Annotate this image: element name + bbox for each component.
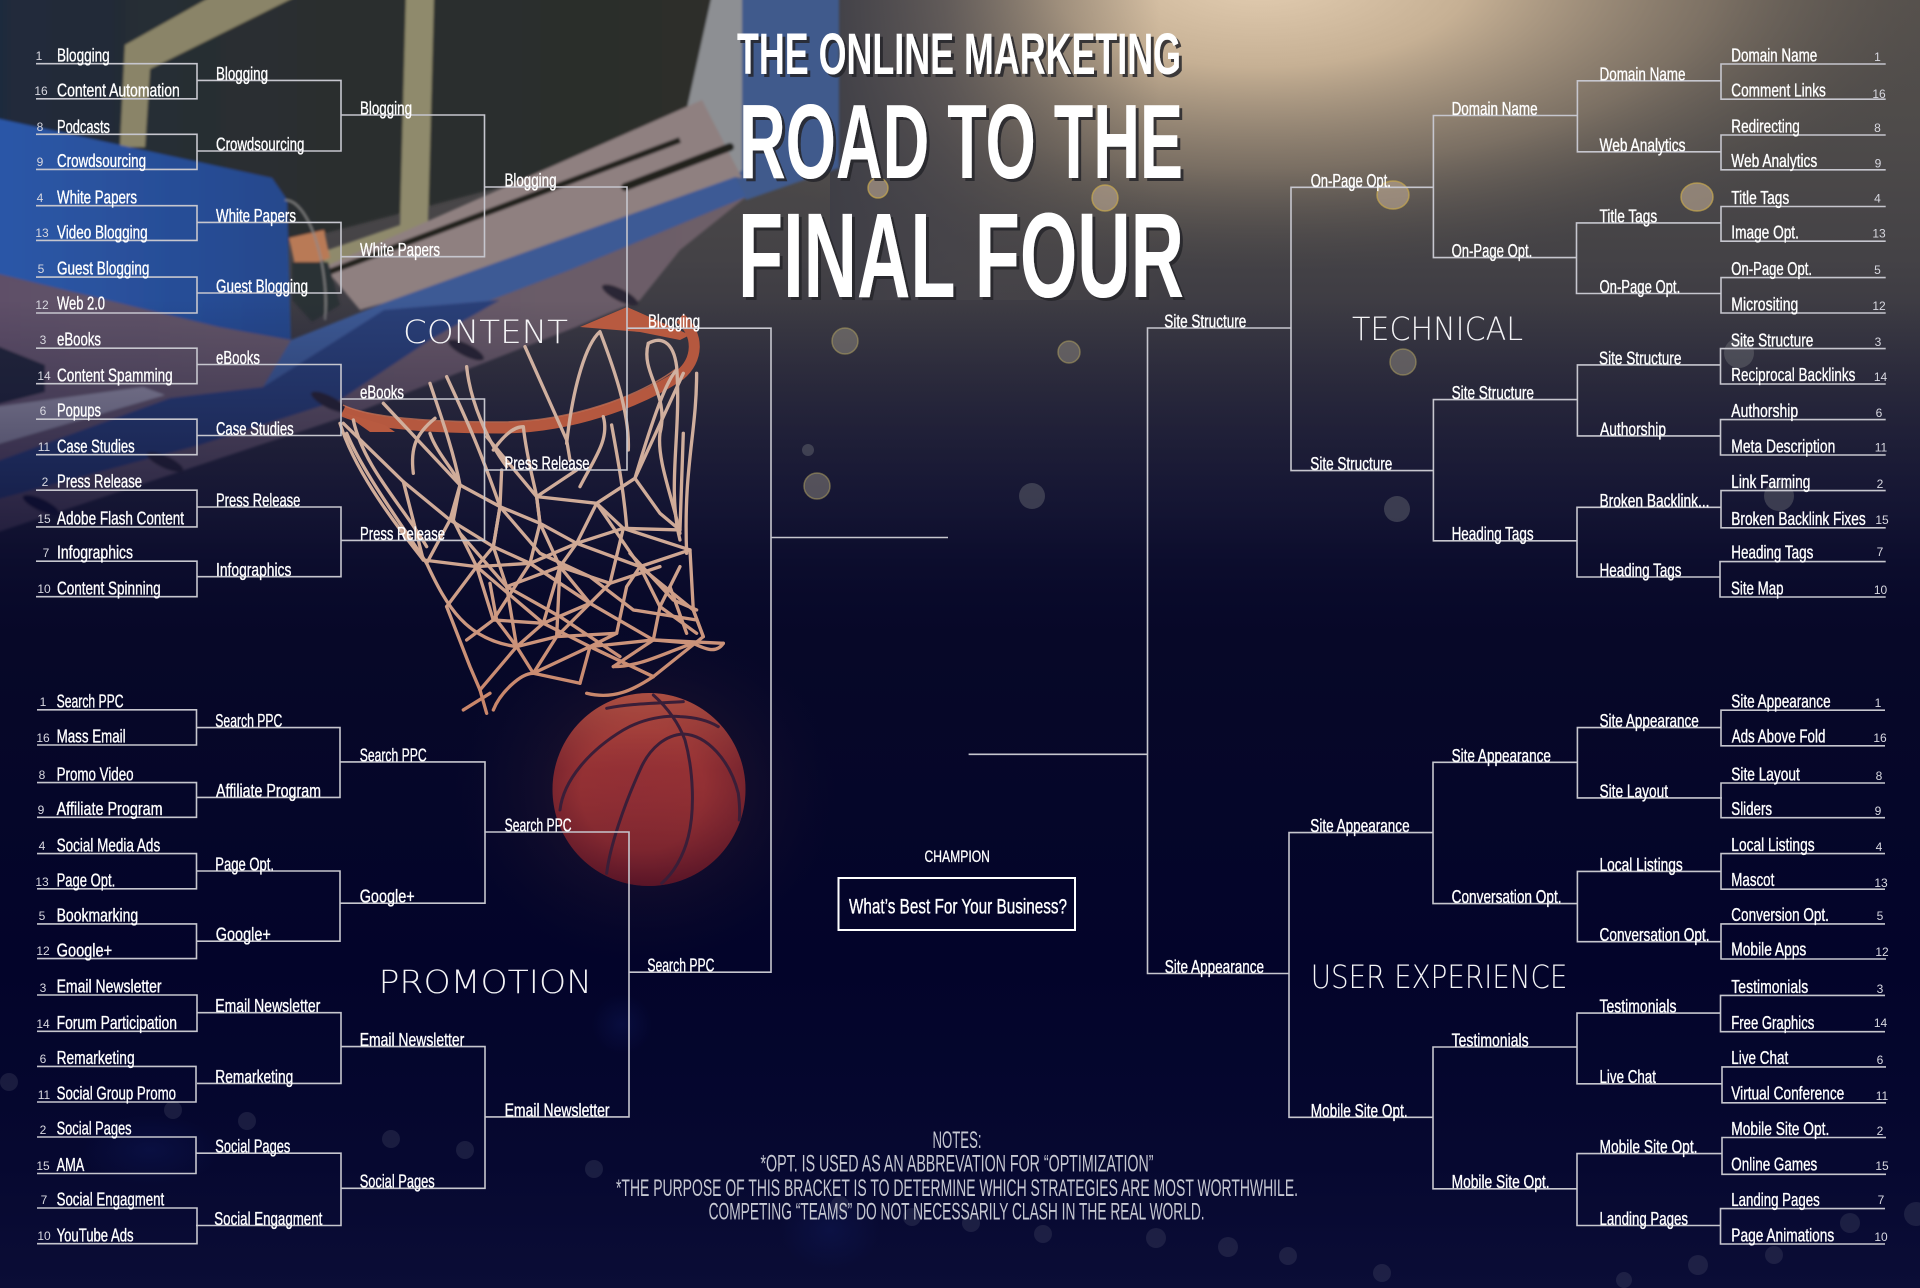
round 1 teams: content: Crowdsourcing (57, 151, 146, 171)
round 3 teams: technical: Site Structure (1452, 383, 1534, 403)
hoop rim (342, 307, 694, 432)
right finalist: site appearance: Site Appearance (1165, 957, 1264, 977)
seeds: content: 2 (42, 475, 49, 489)
round 2 teams: promotion: Social Engagment (214, 1209, 322, 1229)
seeds: promotion: 4 (39, 839, 46, 853)
heading: technical: TECHNICAL (1352, 310, 1523, 348)
seeds: content: 10 (37, 582, 51, 596)
seeds: technical (1872, 50, 1889, 597)
round 2 teams: technical: On-Page Opt. (1600, 277, 1680, 297)
seeds: promotion: 8 (39, 768, 46, 782)
heading: promotion: PROMOTION (379, 963, 592, 1001)
round 1 teams: technical: Reciprocal Backlinks (1731, 365, 1855, 385)
round 1 teams: content: Press Release (57, 472, 142, 492)
round 1 teams: user experience: Live Chat (1731, 1048, 1788, 1068)
note line 3: COMPETING “TEAMS” DO NOT NECESSARILY CLASH IN THE REAL WORLD. (709, 1198, 1205, 1226)
round 1 teams: content: eBooks (57, 330, 101, 350)
round 2 teams: user experience: Local Listings (1600, 855, 1683, 875)
round 1 teams: technical: Micrositing (1731, 294, 1798, 314)
round 1 teams: technical: Meta Description (1731, 436, 1835, 456)
seeds: content: 5 (38, 262, 45, 276)
round 1 teams: technical: Authorship (1731, 401, 1798, 421)
round 2 teams: user experience: Site Appearance (1600, 711, 1699, 731)
notes (616, 1127, 1298, 1226)
round 4 teams: content: Press Release (504, 453, 590, 473)
bracket panel: user experience (1289, 692, 1889, 1246)
round 1 teams: technical: Heading Tags (1731, 542, 1813, 562)
round 1 teams: promotion: Forum Participation (57, 1013, 177, 1033)
round 1 teams: user experience: Site Appearance (1731, 692, 1831, 712)
seeds: technical: 9 (1875, 156, 1882, 170)
seeds: promotion: 14 (36, 1017, 50, 1031)
seeds: user experience: 15 (1875, 1159, 1889, 1173)
seeds: promotion: 2 (40, 1123, 47, 1137)
seeds: technical: 10 (1874, 583, 1887, 597)
round 1 teams: content: Podcasts (57, 117, 110, 137)
round 4 teams: user experience: Mobile Site Opt. (1311, 1101, 1408, 1121)
round 1 teams: content: White Papers (57, 188, 137, 208)
round 1 teams: content: Video Blogging (57, 223, 148, 243)
round 1 teams: user experience: Virtual Conference (1731, 1084, 1844, 1104)
seeds: promotion: 15 (36, 1159, 50, 1173)
round 1 teams: content: Content Spinning (57, 579, 161, 599)
seeds: user experience: 9 (1875, 804, 1882, 818)
round 2 teams: technical: Title Tags (1600, 206, 1657, 226)
round 1 teams: promotion: Social Media Ads (57, 836, 160, 856)
round 3 teams: technical: Domain Name (1452, 99, 1538, 119)
right final connector (969, 328, 1291, 974)
round 1 teams: technical: Domain Name (1731, 46, 1817, 66)
round 1 teams: content: Blogging (57, 46, 110, 66)
round 4 teams: technical (1310, 171, 1392, 474)
round 3 teams: content: Blogging (360, 98, 412, 118)
round 2 teams: promotion: Google+ (216, 924, 271, 944)
round 3 teams: promotion: Google+ (360, 886, 415, 906)
round 1 teams: promotion: Social Group Promo (57, 1084, 176, 1104)
round 3 teams: content: White Papers (360, 240, 440, 260)
round 4 teams: content: Blogging (504, 170, 556, 190)
seeds: technical: 2 (1877, 477, 1884, 491)
round 4 teams: content (504, 170, 590, 473)
round 2 teams: promotion: Social Pages (215, 1136, 290, 1156)
seeds: promotion: 7 (41, 1193, 48, 1207)
notes heading: NOTES: (932, 1127, 982, 1154)
seeds: technical: 11 (1875, 440, 1888, 454)
seeds: user experience: 11 (1876, 1089, 1889, 1103)
round 1 teams: promotion: Promo Video (57, 765, 134, 785)
seeds: user experience: 14 (1874, 1016, 1887, 1030)
round 1 teams: promotion: Social Pages (57, 1119, 132, 1139)
seeds: promotion: 11 (38, 1088, 51, 1102)
seeds: technical: 1 (1874, 50, 1881, 64)
round 3 teams: promotion: Email Newsletter (360, 1030, 464, 1050)
seeds: user experience: 12 (1875, 945, 1889, 959)
round 1 teams: technical: Site Map (1731, 578, 1784, 598)
round 2 teams: technical: Domain Name (1600, 64, 1686, 84)
round 1 teams: technical: Comment Links (1731, 80, 1826, 100)
seeds: content: 11 (38, 440, 51, 454)
seeds: content: 15 (37, 512, 51, 526)
round 2 teams: user experience: Live Chat (1600, 1067, 1656, 1087)
round 2 teams: technical: Authorship (1600, 419, 1666, 439)
round 1 teams: content: Adobe Flash Content (57, 509, 184, 529)
seeds: content: 13 (35, 226, 49, 240)
seeds: user experience: 4 (1876, 840, 1883, 854)
round 2 teams: content: Guest Blogging (216, 276, 308, 296)
round 2 teams: promotion: Email Newsletter (215, 996, 320, 1016)
seeds: content: 16 (34, 84, 48, 98)
seeds: user experience: 5 (1877, 909, 1884, 923)
seeds: content: 14 (37, 369, 51, 383)
round 3 teams: promotion: Social Pages (360, 1171, 435, 1191)
round 1 teams: technical: Site Structure (1731, 330, 1813, 350)
round 1 teams: content: Web 2.0 (57, 294, 105, 314)
round 1 teams: user experience: Conversion Opt. (1731, 905, 1829, 925)
seeds: content: 4 (37, 191, 44, 205)
round 2 teams: user experience: Testimonials (1600, 996, 1676, 1016)
round 1 teams: user experience: Online Games (1731, 1154, 1817, 1174)
round 1 teams: technical: Web Analytics (1731, 151, 1817, 171)
seeds: promotion: 3 (40, 981, 47, 995)
round 1 teams: content: Content Automation (57, 81, 180, 101)
round 1 teams: user experience: Landing Pages (1731, 1190, 1820, 1210)
seeds: user experience: 16 (1873, 731, 1887, 745)
right finalist: site structure: Site Structure (1164, 311, 1246, 331)
round 1 teams: technical: Broken Backlink Fixes (1731, 509, 1866, 529)
round 3 teams: technical: On-Page Opt. (1452, 241, 1532, 261)
round 1 teams: user experience: Local Listings (1731, 835, 1815, 855)
seeds: promotion: 9 (38, 803, 45, 817)
left finalist: blogging: Blogging (648, 311, 700, 331)
round 2 teams: content: eBooks (216, 348, 260, 368)
round 1 teams: promotion (57, 692, 177, 1246)
champion text: What’s Best For Your Business? (849, 894, 1067, 918)
round 4 teams: user experience (1310, 816, 1410, 1121)
bracket lines: content (36, 64, 627, 597)
champion (838, 847, 1075, 930)
seeds: technical: 3 (1875, 335, 1882, 349)
left finalist: search ppc: Search PPC (647, 955, 714, 975)
champion box (838, 878, 1075, 930)
round 3 teams: promotion (360, 745, 464, 1191)
round 4 teams: technical: Site Structure (1310, 454, 1392, 474)
round 2 teams: technical (1599, 64, 1710, 580)
seeds: technical: 12 (1872, 299, 1886, 313)
seeds: technical: 15 (1875, 513, 1889, 527)
seeds: content: 3 (40, 333, 47, 347)
round 1 teams: user experience: Mobile Site Opt. (1731, 1119, 1829, 1139)
round 3 teams: technical: Heading Tags (1452, 524, 1534, 544)
round 2 teams: user experience: Site Layout (1600, 781, 1668, 801)
round 1 teams: promotion: Affiliate Program (57, 799, 163, 819)
seeds: technical: 4 (1874, 192, 1881, 206)
round 2 teams: content: Blogging (216, 64, 268, 84)
round 2 teams: promotion: Search PPC (215, 711, 282, 731)
left finalists (627, 311, 948, 975)
round 1 teams: technical (1731, 46, 1866, 598)
round 2 teams: technical: Broken Backlink... (1600, 491, 1710, 511)
round 1 teams: content: Infographics (57, 543, 133, 563)
seeds: user experience: 2 (1877, 1124, 1884, 1138)
round 3 teams: user experience: Mobile Site Opt. (1452, 1172, 1550, 1192)
round 2 teams: content: Crowdsourcing (216, 134, 304, 154)
seeds: content: 8 (37, 120, 44, 134)
bracket lines: promotion (37, 710, 629, 1244)
round 1 teams: content: Popups (57, 401, 101, 421)
round 2 teams: promotion: Remarketing (215, 1067, 293, 1087)
seeds: technical: 13 (1872, 226, 1886, 240)
round 1 teams: user experience: Mascot (1731, 870, 1774, 890)
seeds: promotion (35, 695, 51, 1243)
seeds: content: 1 (36, 49, 43, 63)
title line 3: FINAL FOUR (738, 187, 1184, 323)
bracket panel: promotion (35, 692, 629, 1246)
round 2 teams: technical: Site Structure (1599, 348, 1681, 368)
round 1 teams: user experience: Sliders (1731, 799, 1772, 819)
round 4 teams: promotion: Email Newsletter (505, 1100, 610, 1120)
note line 2: *THE PURPOSE OF THIS BRACKET IS TO DETERMINE WHICH STRATEGIES ARE MOST WORTHWHILE. (616, 1175, 1298, 1202)
round 1 teams: user experience: Mobile Apps (1731, 940, 1806, 960)
round 2 teams: promotion (214, 711, 322, 1229)
seeds: content: 6 (40, 404, 47, 418)
title line 2: ROAD TO THE (739, 83, 1183, 201)
round 1 teams: promotion: Social Engagment (57, 1190, 164, 1210)
seeds: user experience: 13 (1874, 876, 1888, 890)
round 1 teams: promotion: Google+ (57, 941, 112, 961)
seeds: user experience: 1 (1875, 696, 1882, 710)
round 1 teams: promotion: AMA (57, 1155, 84, 1175)
round 4 teams: promotion: Search PPC (505, 815, 572, 835)
seeds: user experience (1873, 696, 1889, 1244)
seeds: promotion: 10 (37, 1229, 51, 1243)
round 2 teams: promotion: Page Opt. (215, 854, 274, 874)
note line 1: *OPT. IS USED AS AN ABBREVATION FOR “OPTIMIZATION” (760, 1150, 1154, 1178)
seeds: promotion: 6 (40, 1052, 47, 1066)
seeds: technical: 6 (1876, 406, 1883, 420)
round 2 teams: user experience: Conversation Opt. (1600, 925, 1710, 945)
round 3 teams: user experience (1452, 746, 1562, 1192)
seeds: technical: 8 (1874, 121, 1881, 135)
round 1 teams: promotion: Bookmarking (57, 906, 138, 926)
seeds: content: 7 (43, 546, 50, 560)
title line 1: THE ONLINE MARKETING (737, 22, 1181, 87)
title (737, 22, 1184, 323)
round 4 teams: technical: On-Page Opt. (1311, 171, 1391, 191)
round 1 teams: user experience (1731, 692, 1844, 1246)
seeds: technical: 5 (1874, 263, 1881, 277)
round 1 teams: technical: On-Page Opt. (1731, 259, 1812, 279)
round 2 teams: content: Infographics (216, 560, 291, 580)
seeds: promotion: 5 (39, 909, 46, 923)
seeds: technical: 7 (1877, 545, 1884, 559)
round 1 teams: technical: Redirecting (1731, 116, 1800, 136)
basketball (552, 693, 746, 886)
round 3 teams: content (360, 98, 445, 544)
round 2 teams: promotion: Affiliate Program (216, 781, 321, 801)
seeds: content (34, 49, 51, 596)
round 3 teams: user experience: Site Appearance (1452, 746, 1551, 766)
round 1 teams: promotion: Page Opt. (57, 871, 115, 891)
seeds: content: 9 (37, 155, 44, 169)
bracket lines: technical (1291, 64, 1886, 597)
round 1 teams: technical: Title Tags (1731, 188, 1789, 208)
round 1 teams: content: Case Studies (57, 437, 135, 457)
seeds: user experience: 7 (1878, 1193, 1885, 1207)
seeds: promotion: 1 (40, 695, 47, 709)
round 2 teams: user experience: Landing Pages (1600, 1209, 1688, 1229)
seeds: promotion: 12 (36, 944, 50, 958)
round 3 teams: user experience: Conversation Opt. (1452, 887, 1562, 907)
seeds: technical: 16 (1872, 87, 1886, 101)
bracket panel: technical (1291, 46, 1889, 598)
round 1 teams: promotion: YouTube Ads (57, 1226, 134, 1246)
round 3 teams: user experience: Testimonials (1452, 1030, 1529, 1050)
round 1 teams: user experience: Page Animations (1731, 1226, 1834, 1246)
heading: user experience: USER EXPERIENCE (1311, 958, 1567, 996)
round 1 teams: user experience: Testimonials (1731, 977, 1808, 997)
round 2 teams: technical: Heading Tags (1600, 560, 1682, 580)
round 1 teams: user experience: Site Layout (1731, 764, 1800, 784)
seeds: user experience: 6 (1877, 1053, 1884, 1067)
round 1 teams: promotion: Remarketing (57, 1048, 135, 1068)
round 2 teams: content: Press Release (216, 490, 300, 510)
left final connector (627, 328, 948, 972)
round 1 teams: promotion: Email Newsletter (57, 977, 162, 997)
round 1 teams: content: Content Spamming (57, 366, 173, 386)
round 2 teams: user experience: Mobile Site Opt. (1600, 1137, 1698, 1157)
round 1 teams: content (57, 46, 184, 599)
seeds: user experience: 3 (1877, 982, 1884, 996)
round 1 teams: content: Guest Blogging (57, 259, 149, 279)
round 2 teams: user experience (1600, 711, 1710, 1229)
basketball net (340, 332, 723, 713)
bracket lines: user experience (1289, 710, 1886, 1244)
round 4 teams: promotion (505, 815, 610, 1120)
round 2 teams: technical: Web Analytics (1600, 135, 1686, 155)
seeds: content: 12 (35, 298, 49, 312)
round 3 teams: content: eBooks (360, 382, 404, 402)
round 3 teams: technical (1452, 99, 1538, 544)
seeds: user experience: 10 (1874, 1230, 1888, 1244)
champion label: CHAMPION (924, 847, 990, 866)
round 1 teams: promotion: Mass Email (57, 727, 126, 747)
round 1 teams: technical: Image Opt. (1731, 222, 1799, 242)
seeds: promotion: 13 (35, 875, 49, 889)
seeds: user experience: 8 (1876, 769, 1883, 783)
right finalists (969, 311, 1291, 977)
round 4 teams: user experience: Site Appearance (1310, 816, 1410, 836)
seeds: promotion: 16 (36, 731, 50, 745)
round 3 teams: promotion: Search PPC (360, 745, 427, 765)
seeds: technical: 14 (1874, 370, 1887, 384)
round 2 teams: content (216, 64, 308, 580)
round 1 teams: user experience: Ads Above Fold (1732, 726, 1825, 746)
round 3 teams: content: Press Release (360, 524, 445, 544)
bracket panel: content (34, 46, 627, 599)
round 2 teams: content: Case Studies (216, 419, 294, 439)
round 1 teams: technical: Link Farming (1731, 472, 1810, 492)
heading: content: CONTENT (403, 313, 568, 351)
round 1 teams: promotion: Search PPC (57, 692, 124, 712)
round 1 teams: user experience: Free Graphics (1731, 1013, 1814, 1033)
round 2 teams: content: White Papers (216, 206, 296, 226)
